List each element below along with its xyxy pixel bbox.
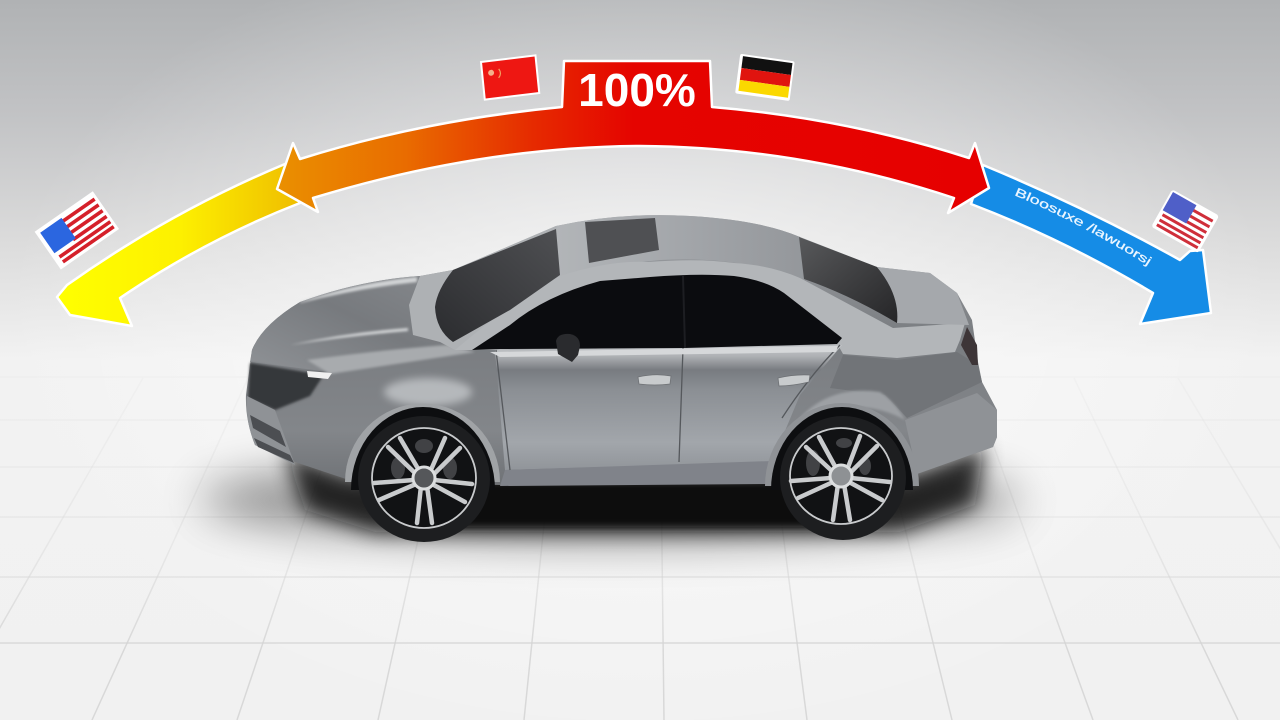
car ground shadow [200,445,1020,542]
hood lower light band [307,345,475,374]
flag: USA right [1151,189,1219,253]
rear fender highlight [800,391,905,420]
side window [472,275,842,350]
A-pillar light panel [409,226,562,350]
side door panels [495,345,842,470]
rear window [799,237,899,323]
door handles [638,375,810,386]
arrow: yellow curved arrow pointing left [57,164,300,326]
hood [250,276,447,372]
flag: China [481,55,539,100]
front bumper [247,396,295,465]
front wheel [358,416,490,542]
belt-line highlight [490,346,838,357]
front wheel well [351,407,495,490]
flag: Germany [735,54,795,101]
rear wheel arch [765,403,919,486]
door seam lines [496,345,840,470]
floor tile grid [0,377,1280,720]
front fender highlight [384,378,472,406]
front grille [250,415,294,463]
rear wheel well [771,407,913,490]
windshield [435,229,560,342]
blue arrow label: Bloosuxe /lawuorsj [1015,188,1152,267]
car [246,215,997,542]
rear wheel [780,416,906,540]
side mirror [556,334,580,362]
rear quarter panel [830,352,982,418]
sunroof [585,218,659,263]
100% label: 100% [578,64,696,116]
front wheel arch [345,403,500,482]
window center pillar [683,276,685,348]
car body [246,215,997,485]
arrow: orange-to-red curved arrow with 100% tab [277,61,989,213]
rear bumper [905,393,997,474]
light band above side window [455,260,965,358]
trunk lid [877,267,969,325]
arrow: blue curved arrow pointing right [970,164,1212,325]
headlight accent [307,371,332,379]
headlight [248,363,325,410]
roof [556,215,805,282]
tail light [961,327,978,365]
hood highlights [290,277,417,345]
side sill [500,461,772,486]
flag: USA left [35,191,119,269]
